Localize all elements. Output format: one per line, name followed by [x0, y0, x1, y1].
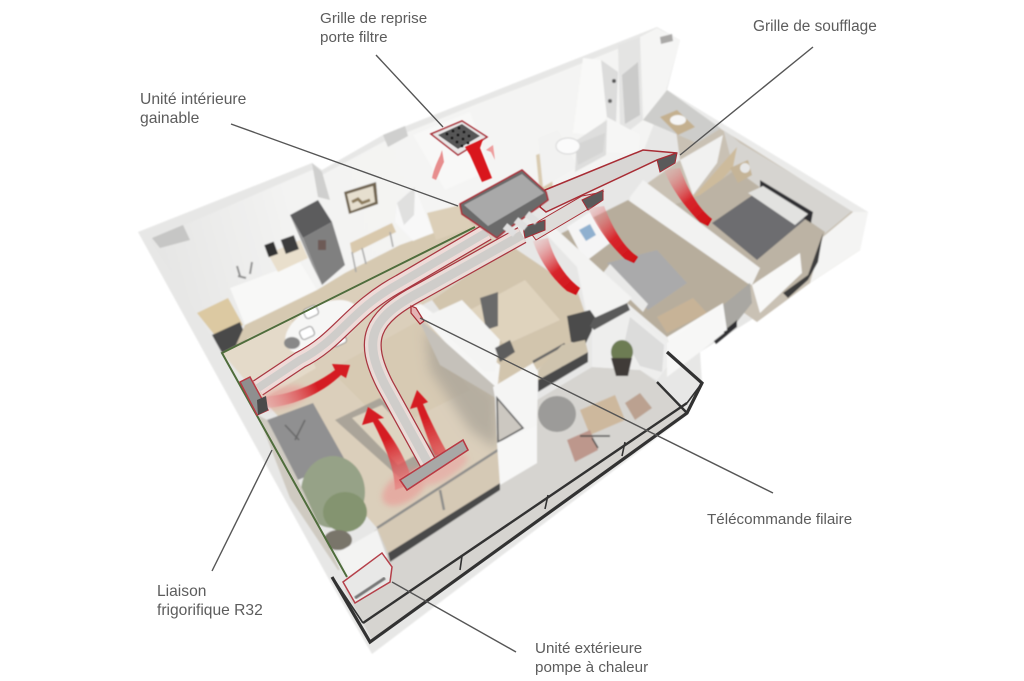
- duct to window grille: [373, 235, 522, 463]
- green plant: [301, 456, 367, 550]
- office dark window floor: [538, 352, 588, 392]
- wall grille in living room: [400, 440, 468, 490]
- potted plant: [611, 340, 633, 376]
- supply grille near: [523, 220, 545, 238]
- desk in middle room: [567, 212, 610, 262]
- outer rim of right bedroom wall: [667, 90, 868, 212]
- label: Grille de reprise porte filtre: porte filtre: [320, 29, 388, 46]
- return air grille with filter: [431, 121, 487, 155]
- office chairs: [480, 292, 498, 330]
- window floor strip: [377, 450, 500, 553]
- kitchen floor: [236, 220, 478, 345]
- label: Unité extérieure pompe à chaleur: pompe à chaleur: [535, 659, 648, 676]
- label: Unité intérieure gainable: gainable: [140, 110, 200, 127]
- wall return beside kitchen: [312, 163, 330, 200]
- back wall of right bedroom: [723, 128, 853, 235]
- wall shadow in living room: [425, 330, 500, 450]
- refrigerant line: [222, 227, 475, 577]
- arrow: return air large: [465, 139, 492, 182]
- kitchen small objects: [264, 242, 278, 257]
- duct to left wall grille: [258, 232, 487, 388]
- label: Unité intérieure gainable: Unité intérieure: [140, 91, 246, 108]
- label: Liaison frigorifique R32: frigorifique R32: [157, 602, 263, 619]
- label: Télécommande filaire: Télécommande filaire: [707, 511, 852, 528]
- arrow: window supply right: [410, 390, 447, 456]
- sofa: [267, 403, 345, 480]
- bathroom tower: [573, 28, 680, 135]
- silhouette: [138, 27, 868, 654]
- arrow: window supply left: [362, 407, 412, 490]
- apartment building: [138, 27, 868, 654]
- wall near far supply grille: [680, 135, 723, 195]
- door opposite central unit: [536, 150, 553, 195]
- label: Grille de reprise porte filtre: Grille de reprise: [320, 10, 427, 27]
- outdoor terrace furniture: [538, 393, 652, 462]
- dark window of middle room: [713, 283, 752, 340]
- indoor ducted unit: [460, 170, 548, 238]
- ducts to supply grilles: [523, 150, 677, 240]
- right bedroom room shell: [638, 100, 860, 322]
- exterior white walls beside living room: [337, 530, 387, 577]
- white half wall: [395, 187, 433, 241]
- kitchen counter: [230, 262, 317, 325]
- balcony railing: [332, 352, 702, 642]
- round dining table: [276, 289, 368, 365]
- office rail: [533, 344, 565, 367]
- main bed in right room: [712, 160, 813, 260]
- fridge column: [290, 200, 345, 285]
- back wall of kitchen and living room: [150, 40, 667, 353]
- wired remote control: [411, 306, 424, 324]
- arrow: left wall supply: [262, 364, 350, 408]
- white block at corridor end: [493, 363, 538, 443]
- kitchen wall niche: [152, 225, 190, 248]
- living floor: [222, 226, 505, 528]
- office floor: [432, 245, 590, 385]
- living room airflow haze: [258, 381, 471, 513]
- supply airflow arrow near room: [533, 238, 580, 295]
- vanity room: [643, 90, 723, 143]
- console table: [350, 223, 396, 254]
- wall B between office and bedroom: [545, 228, 632, 330]
- office desk: [427, 300, 500, 372]
- right end wall of bedroom: [810, 212, 868, 283]
- central wall niches: [383, 126, 408, 147]
- outdoor heat pump: [343, 553, 392, 603]
- arrow: return air small left: [432, 150, 444, 180]
- rug: [335, 398, 440, 478]
- label: Grille de soufflage: Grille de soufflage: [753, 18, 877, 35]
- terrace end wall: [592, 310, 667, 380]
- picture frame on wall: [344, 182, 378, 214]
- left wall grille: [240, 377, 268, 415]
- strip beside sofa: [258, 415, 340, 570]
- right bedroom floor: [660, 170, 825, 293]
- supply grille middle: [582, 190, 603, 210]
- label: Liaison frigorifique R32: Liaison: [157, 583, 206, 600]
- wall A between bedrooms: [628, 180, 760, 285]
- label: Unité extérieure pompe à chaleur: Unité extérieure: [535, 640, 642, 657]
- toilet: [556, 138, 580, 154]
- supply airflow arrow far room: [664, 168, 712, 226]
- middle bed: [607, 250, 687, 310]
- dark floor band below window: [388, 483, 500, 562]
- arrow: return air small right: [486, 145, 495, 160]
- supply airflow arrow middle room: [588, 206, 638, 263]
- supply grille far: [657, 153, 677, 172]
- window opening: [497, 398, 523, 442]
- leader lines: [212, 47, 813, 652]
- bathroom low walls: [538, 130, 577, 187]
- balcony floor: [345, 367, 687, 640]
- wall between living room and office: [412, 304, 500, 390]
- middle bedroom floor: [552, 200, 750, 355]
